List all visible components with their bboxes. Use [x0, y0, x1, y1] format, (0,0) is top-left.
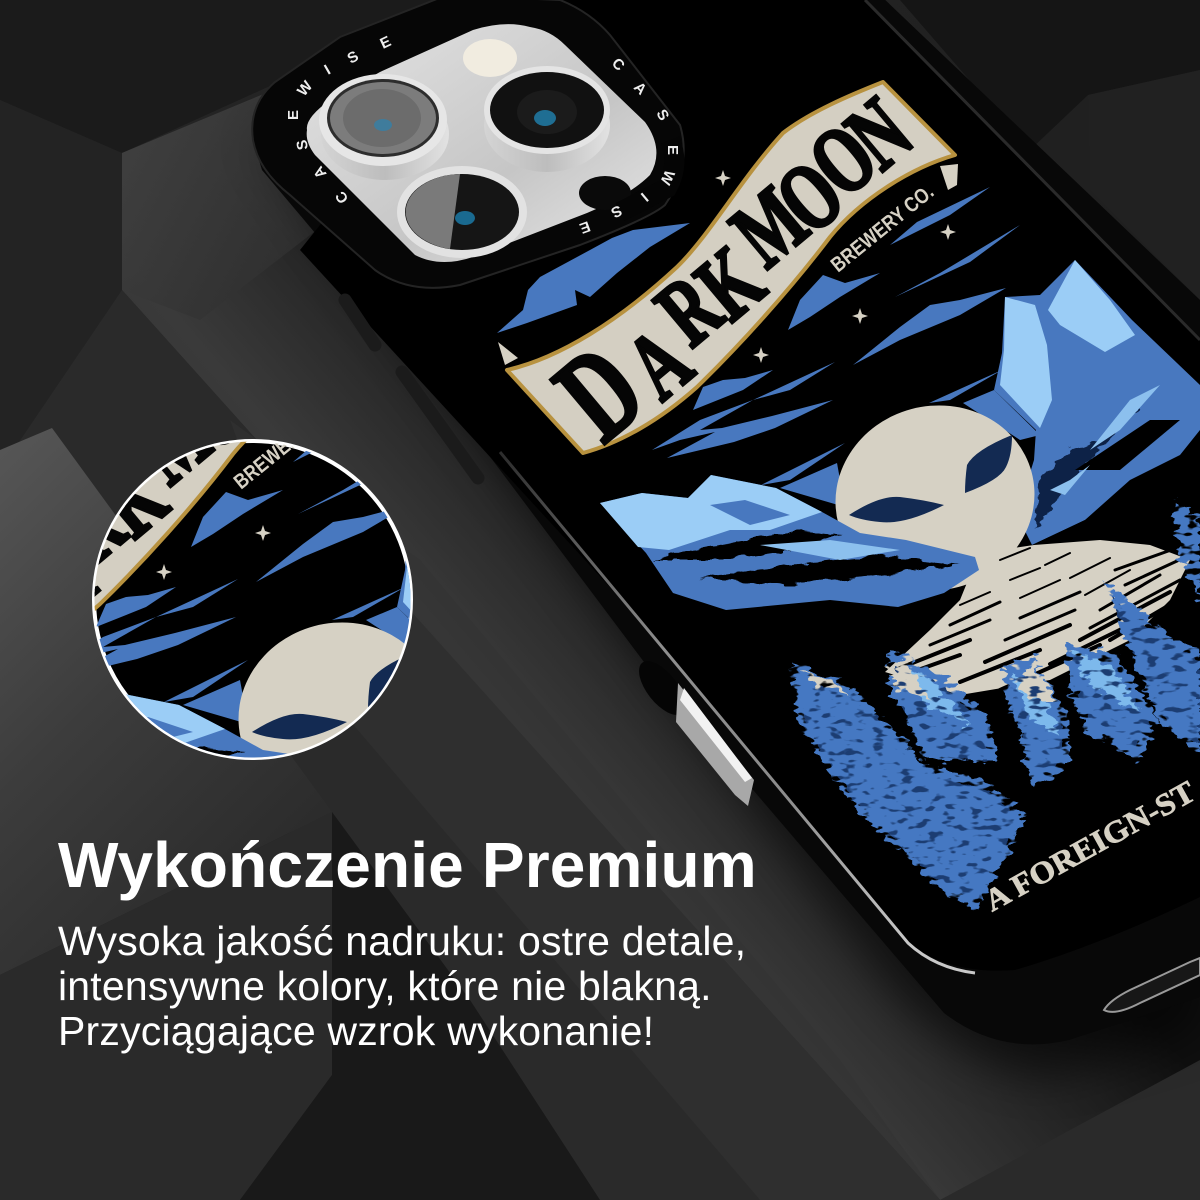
- screen rim highlight: [500, 452, 975, 973]
- flash: [463, 39, 517, 77]
- floor at bottom right: [940, 1060, 1200, 1200]
- lens: left: [319, 74, 449, 180]
- silver side key: [630, 654, 754, 806]
- top right blocks: [900, 0, 1200, 150]
- body text: [58, 918, 746, 1054]
- lake ripples: [890, 545, 1195, 690]
- body text: Przyciągające wzrok wykonanie!: [58, 1008, 654, 1054]
- caption block: [58, 829, 757, 1054]
- magnified detail circle: [92, 439, 413, 760]
- brand ring edge: [620, 140, 674, 212]
- magnified banner lettering: ARK MOON: [0, 293, 356, 636]
- flying saucers: [849, 435, 1012, 522]
- charging port: [1104, 958, 1200, 1012]
- screen: [300, 0, 1200, 971]
- lower stone step: [0, 428, 332, 975]
- bottom caption: A FOREIGN-ST: [978, 773, 1200, 918]
- lens: bottom: [397, 166, 527, 258]
- top-left dark wall: [0, 0, 460, 153]
- magnified subtitle: BREWERY CO.: [230, 397, 341, 494]
- brand text left: CASEWISE: [285, 33, 394, 206]
- lens: right: [484, 66, 610, 172]
- phone shadow: [253, 133, 1200, 1074]
- body text: intensywne kolory, które nie blakną.: [58, 963, 712, 1009]
- mountain left: [600, 475, 979, 610]
- body text: Wysoka jakość nadruku: ostre detale,: [58, 918, 746, 964]
- artwork on phone: [497, 76, 1200, 918]
- pine forest underlay: [800, 595, 1200, 900]
- stars: [715, 170, 956, 363]
- banner title: D: [529, 317, 669, 467]
- heading: Wykończenie Premium: [58, 829, 757, 901]
- pine forest: [790, 500, 1200, 910]
- moon: [815, 383, 1055, 613]
- shadow side of block: [0, 290, 940, 1200]
- side buttons: [345, 300, 478, 478]
- camera island: [252, 0, 684, 288]
- banner subtitle: BREWERY CO.: [827, 180, 938, 277]
- phone body: [252, 0, 1200, 1044]
- mountain right: [994, 260, 1200, 548]
- artwork shapes: [497, 82, 1200, 910]
- clouds: [497, 187, 1040, 507]
- brand text right: CASEWISE: [577, 55, 681, 237]
- lake: [885, 540, 1190, 695]
- small pine icons: [498, 164, 958, 365]
- banner title: ARK MOON: [583, 76, 953, 419]
- sensor: [579, 176, 631, 210]
- banner: [507, 82, 955, 453]
